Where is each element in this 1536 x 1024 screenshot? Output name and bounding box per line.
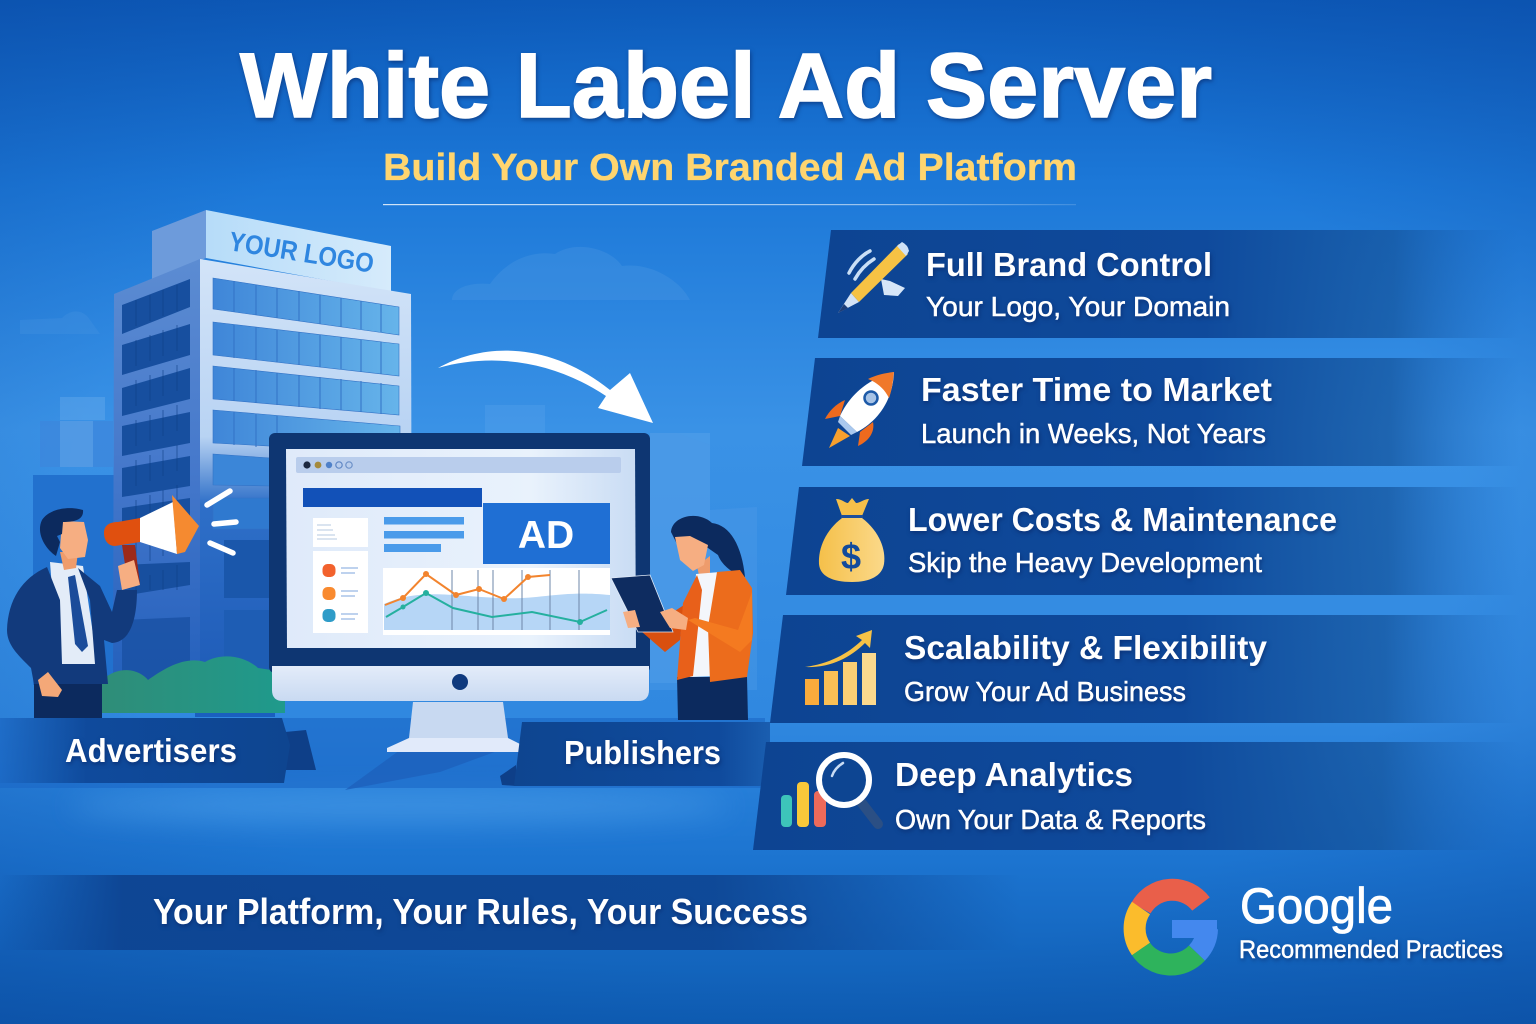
trousers [677, 677, 748, 720]
window mullions [234, 281, 381, 448]
google logo [1135, 878, 1503, 965]
stand [387, 702, 520, 752]
ribbon: advertisers: Advertisers [65, 732, 237, 769]
address bar [296, 457, 621, 473]
ribbon: advertisers [0, 718, 316, 783]
person: publisher with tablet [611, 516, 753, 720]
bezel [269, 433, 650, 673]
right face [200, 259, 412, 682]
google logo: Google [1240, 878, 1393, 934]
left face [113, 259, 200, 682]
hand on hip [38, 672, 62, 697]
panel: faster time to market: Faster Time to Market [921, 371, 1272, 408]
left window mullions [136, 285, 177, 590]
panel: scalability and flexibility: Grow Your Ad Business [904, 676, 1186, 707]
jacket [7, 567, 137, 684]
logo sign [206, 210, 391, 292]
neck and face [697, 556, 710, 580]
panel: full brand control [818, 230, 1520, 338]
hair [671, 516, 745, 577]
icon: analytics magnifier [781, 755, 878, 827]
icon: money bag: $ [841, 536, 861, 577]
front arm [688, 592, 752, 652]
subtitle: Build Your Own Branded Ad Platform [383, 147, 1077, 189]
icon: rocket [825, 372, 894, 448]
bushes [102, 656, 285, 713]
sound lines [207, 491, 236, 553]
ribbon: publishers [500, 722, 770, 786]
hands [623, 610, 640, 628]
shirt [50, 562, 98, 668]
hair [40, 508, 83, 556]
chin [272, 666, 649, 701]
shirt [690, 572, 720, 677]
panel: deep analytics [753, 742, 1520, 850]
icon: money bag [819, 498, 884, 582]
left windows [122, 279, 190, 680]
text bars [384, 517, 464, 552]
panel: faster time to market: Launch in Weeks, Not Years [921, 418, 1266, 449]
icon: megaphone [104, 491, 236, 590]
page header [303, 488, 482, 507]
background skyline [0, 247, 765, 790]
monitor [269, 433, 650, 752]
title: White Label Ad Server [240, 35, 1212, 137]
dark lower floors [224, 540, 270, 598]
panel: lower costs and maintenance: Lower Costs & Maintenance [908, 501, 1337, 538]
curved arrow [438, 351, 653, 423]
tie [68, 575, 88, 652]
panel: scalability and flexibility [770, 615, 1520, 723]
icon: pencil [838, 242, 909, 313]
icon: growth chart [805, 630, 876, 705]
panel: faster time to market [802, 358, 1520, 466]
ad block [483, 503, 610, 564]
panel: full brand control: Full Brand Control [926, 246, 1212, 283]
panel: lower costs and maintenance: Skip the Heavy Development [908, 547, 1262, 578]
ad block: AD [518, 514, 574, 557]
tablet [611, 575, 673, 632]
side cards [313, 518, 368, 633]
panel: deep analytics: Deep Analytics [895, 756, 1133, 793]
screen [286, 449, 636, 648]
logo sign: YOUR LOGO [227, 226, 376, 279]
jacket [677, 575, 702, 680]
panel: scalability and flexibility: Scalability & Flexibility [904, 629, 1268, 666]
right windows [213, 278, 400, 529]
bottom tagline strip [0, 875, 1020, 950]
holding hand [118, 560, 140, 590]
panel: lower costs and maintenance [786, 487, 1520, 595]
building [113, 210, 412, 682]
neck and face [60, 552, 78, 570]
ribbon: publishers: Publishers [564, 734, 721, 771]
bottom tagline strip: Your Platform, Your Rules, Your Success [153, 891, 808, 932]
left arm [642, 605, 684, 652]
panel: full brand control: Your Logo, Your Domain [926, 291, 1230, 322]
icon: google g [1135, 890, 1217, 965]
rear roof box [152, 210, 206, 280]
trousers [34, 682, 102, 718]
line chart [383, 568, 610, 635]
google logo: Recommended Practices [1239, 936, 1503, 964]
panel: deep analytics: Own Your Data & Reports [895, 804, 1206, 835]
person: advertiser with megaphone [7, 508, 137, 718]
